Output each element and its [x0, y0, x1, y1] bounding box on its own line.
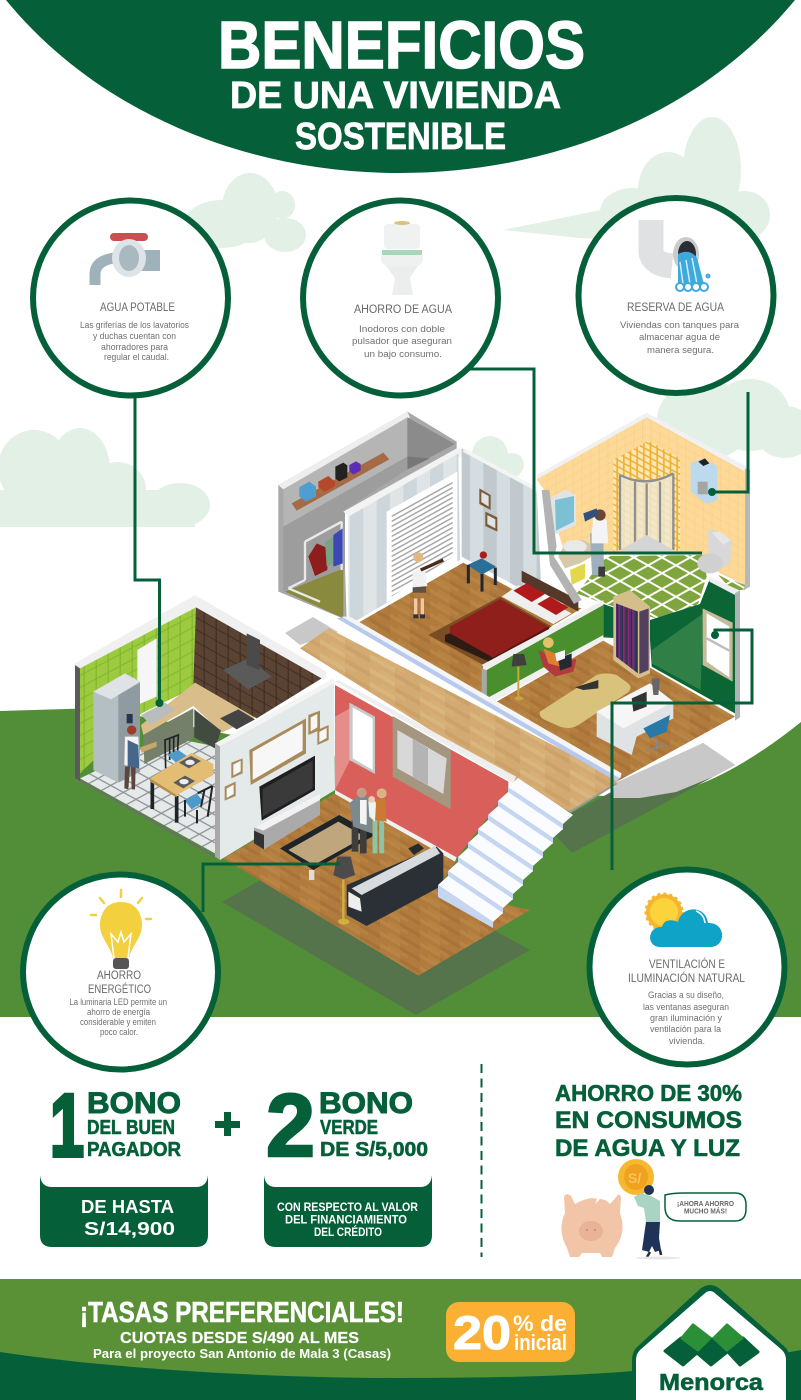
floor lamp: [512, 654, 527, 700]
bono 1: 1: [50, 1075, 84, 1175]
illustration: piggy bank and person: S/: [628, 1170, 641, 1186]
woman with violin: [413, 552, 443, 618]
title: BENEFICIOS: [218, 8, 585, 83]
circle: ahorro energetico: [23, 874, 218, 1070]
closet room: [278, 412, 457, 620]
rug and cat: [540, 673, 630, 728]
circle: agua potable: Las griferías de los lavatorios: [80, 320, 189, 330]
circle: reserva de agua: [578, 198, 774, 393]
box: con respecto: DEL CRÉDITO: [314, 1226, 382, 1239]
circle: ahorro de agua: pulsador que aseguran: [352, 336, 452, 346]
logo: Menorca: [632, 1285, 790, 1400]
circle: ventilacion: vivienda.: [669, 1036, 705, 1046]
box: con respecto: CON RESPECTO AL VALOR: [277, 1202, 419, 1214]
box: con respecto: [264, 1175, 432, 1247]
box: de hasta: [40, 1175, 208, 1247]
sofa: [347, 843, 443, 926]
icon: pipe with water: [651, 220, 710, 291]
office floor: [497, 641, 735, 783]
circle: ventilacion: gran iluminación y: [650, 1013, 722, 1023]
circle: ahorro energetico: La luminaria LED permite un: [70, 997, 167, 1007]
bono 1: DEL BUEN: [87, 1117, 175, 1139]
box: con respecto: DEL FINANCIAMIENTO: [285, 1214, 407, 1226]
tv and console: [254, 756, 320, 849]
circle: ahorro de agua: [303, 200, 498, 396]
icon: sun and cloud: [646, 894, 722, 947]
ahorro heading: [555, 1080, 742, 1162]
bono 2: [266, 1075, 428, 1175]
bono 2: DE S/5,000: [320, 1139, 428, 1161]
bedside table: [467, 551, 496, 592]
woman in armchair: [538, 637, 577, 677]
corridor: [300, 617, 622, 812]
connector lines: [135, 369, 752, 912]
icon: faucet: [95, 233, 160, 285]
footer text: Para el proyecto San Antonio de Mala 3 (Casas): [93, 1346, 391, 1361]
grass ground: [0, 708, 801, 1017]
circle: agua potable: regular el caudal.: [104, 352, 169, 362]
office room walls: [482, 577, 740, 721]
logo mark: [665, 1325, 758, 1365]
ahorro heading: DE AGUA Y LUZ: [555, 1135, 740, 1162]
coffee table: [280, 815, 375, 880]
circle: agua potable: y duchas cuentan con: [93, 331, 176, 341]
logo: Menorca: Menorca: [659, 1369, 764, 1395]
header arc: [6, 0, 795, 173]
circle: ahorro energetico: considerable y emiten: [80, 1017, 156, 1027]
badge: 20% de inicial: [446, 1302, 575, 1362]
bono 2: VERDE: [320, 1117, 378, 1139]
title: DE UNA VIVIENDA: [230, 75, 561, 117]
counter and cabinets: [141, 683, 255, 764]
bookcase: [613, 590, 650, 678]
badge: 20% de inicial: 20: [453, 1306, 511, 1359]
house upper floor: [278, 412, 750, 812]
bono 2: BONO: [319, 1087, 413, 1120]
circle: agua potable: AGUA POTABLE: [100, 302, 175, 314]
circle: reserva de agua: RESERVA DE AGUA: [627, 302, 724, 314]
circle: ahorro energetico: ahorro de energía: [87, 1007, 150, 1017]
ahorro heading: EN CONSUMOS: [555, 1107, 742, 1134]
bedroom back walls: [343, 448, 542, 622]
circle: ventilacion: [590, 870, 784, 1064]
circle: ahorro de agua: Inodoros con doble: [359, 324, 445, 334]
circle: ventilacion: Gracias a su diseño,: [648, 990, 724, 1000]
circle: ahorro de agua: un bajo consumo.: [364, 349, 442, 359]
title: SOSTENIBLE: [295, 116, 506, 158]
circle: ventilacion: ventilación para la: [650, 1024, 721, 1034]
kitchen furniture: [93, 673, 255, 823]
bedroom floor: [358, 563, 582, 693]
circle: agua potable: ahorradores para: [101, 342, 168, 352]
circle: ventilacion: las ventanas aseguran: [643, 1002, 729, 1012]
speech bubble: MUCHO MÁS!: [684, 1206, 727, 1216]
circle: ventilacion: VENTILACIÓN E: [649, 958, 725, 971]
family: [349, 788, 387, 853]
dining set: [150, 735, 213, 823]
footer text: ¡TASAS PREFERENCIALES!: [80, 1297, 404, 1329]
bathroom: [537, 413, 750, 623]
bono 1: PAGADOR: [87, 1139, 182, 1161]
badge: 20% de inicial: % de: [513, 1311, 567, 1336]
illustration: piggy bank and person: [561, 1159, 680, 1260]
plus sign: [215, 1112, 240, 1136]
title: [218, 8, 585, 158]
fridge: [93, 673, 140, 783]
circle: agua potable: [33, 200, 228, 396]
circle: reserva de agua: manera segura.: [647, 345, 714, 355]
footer text: [80, 1297, 404, 1361]
bono 2: 2: [266, 1075, 315, 1175]
bono 1: BONO: [87, 1087, 181, 1120]
circle: ahorro de agua: AHORRO DE AGUA: [354, 304, 452, 316]
circle: ventilacion: ILUMINACIÓN NATURAL: [628, 972, 746, 985]
ground shadows: [222, 617, 735, 1015]
bono 1: [50, 1075, 182, 1175]
standing lamp: [333, 857, 355, 925]
speech bubble: ¡AHORA AHORRO: [677, 1201, 735, 1208]
circle: ahorro energetico: ENERGÉTICO: [88, 983, 151, 996]
speech bubble: [665, 1193, 746, 1221]
box: de hasta: S/14,900: [84, 1219, 175, 1239]
icon: toilet: [381, 221, 423, 295]
box: de hasta: DE HASTA: [81, 1197, 174, 1217]
house ground floor: [75, 595, 530, 976]
circle: ahorro energetico: poco calor.: [100, 1027, 138, 1037]
circle: reserva de agua: Viviendas con tanques para: [620, 320, 739, 330]
staircase: [438, 778, 573, 928]
circle: reserva de agua: almacenar agua de: [639, 332, 720, 342]
living room floor: [223, 793, 530, 976]
bed: [428, 571, 578, 665]
living room walls: [215, 678, 516, 860]
kitchen walls and floor: [75, 595, 327, 857]
desk: [597, 678, 673, 755]
badge: 20% de inicial: inicial: [514, 1330, 567, 1355]
footer text: CUOTAS DESDE S/490 AL MES: [120, 1330, 359, 1347]
footer band: [0, 1279, 801, 1400]
dashed divider: [480, 1064, 482, 1257]
clouds: [0, 117, 801, 527]
icon: light bulb: [91, 890, 151, 969]
circle: ahorro energetico: AHORRO: [97, 970, 141, 982]
ahorro heading: AHORRO DE 30%: [555, 1080, 742, 1106]
cook: [124, 725, 157, 789]
